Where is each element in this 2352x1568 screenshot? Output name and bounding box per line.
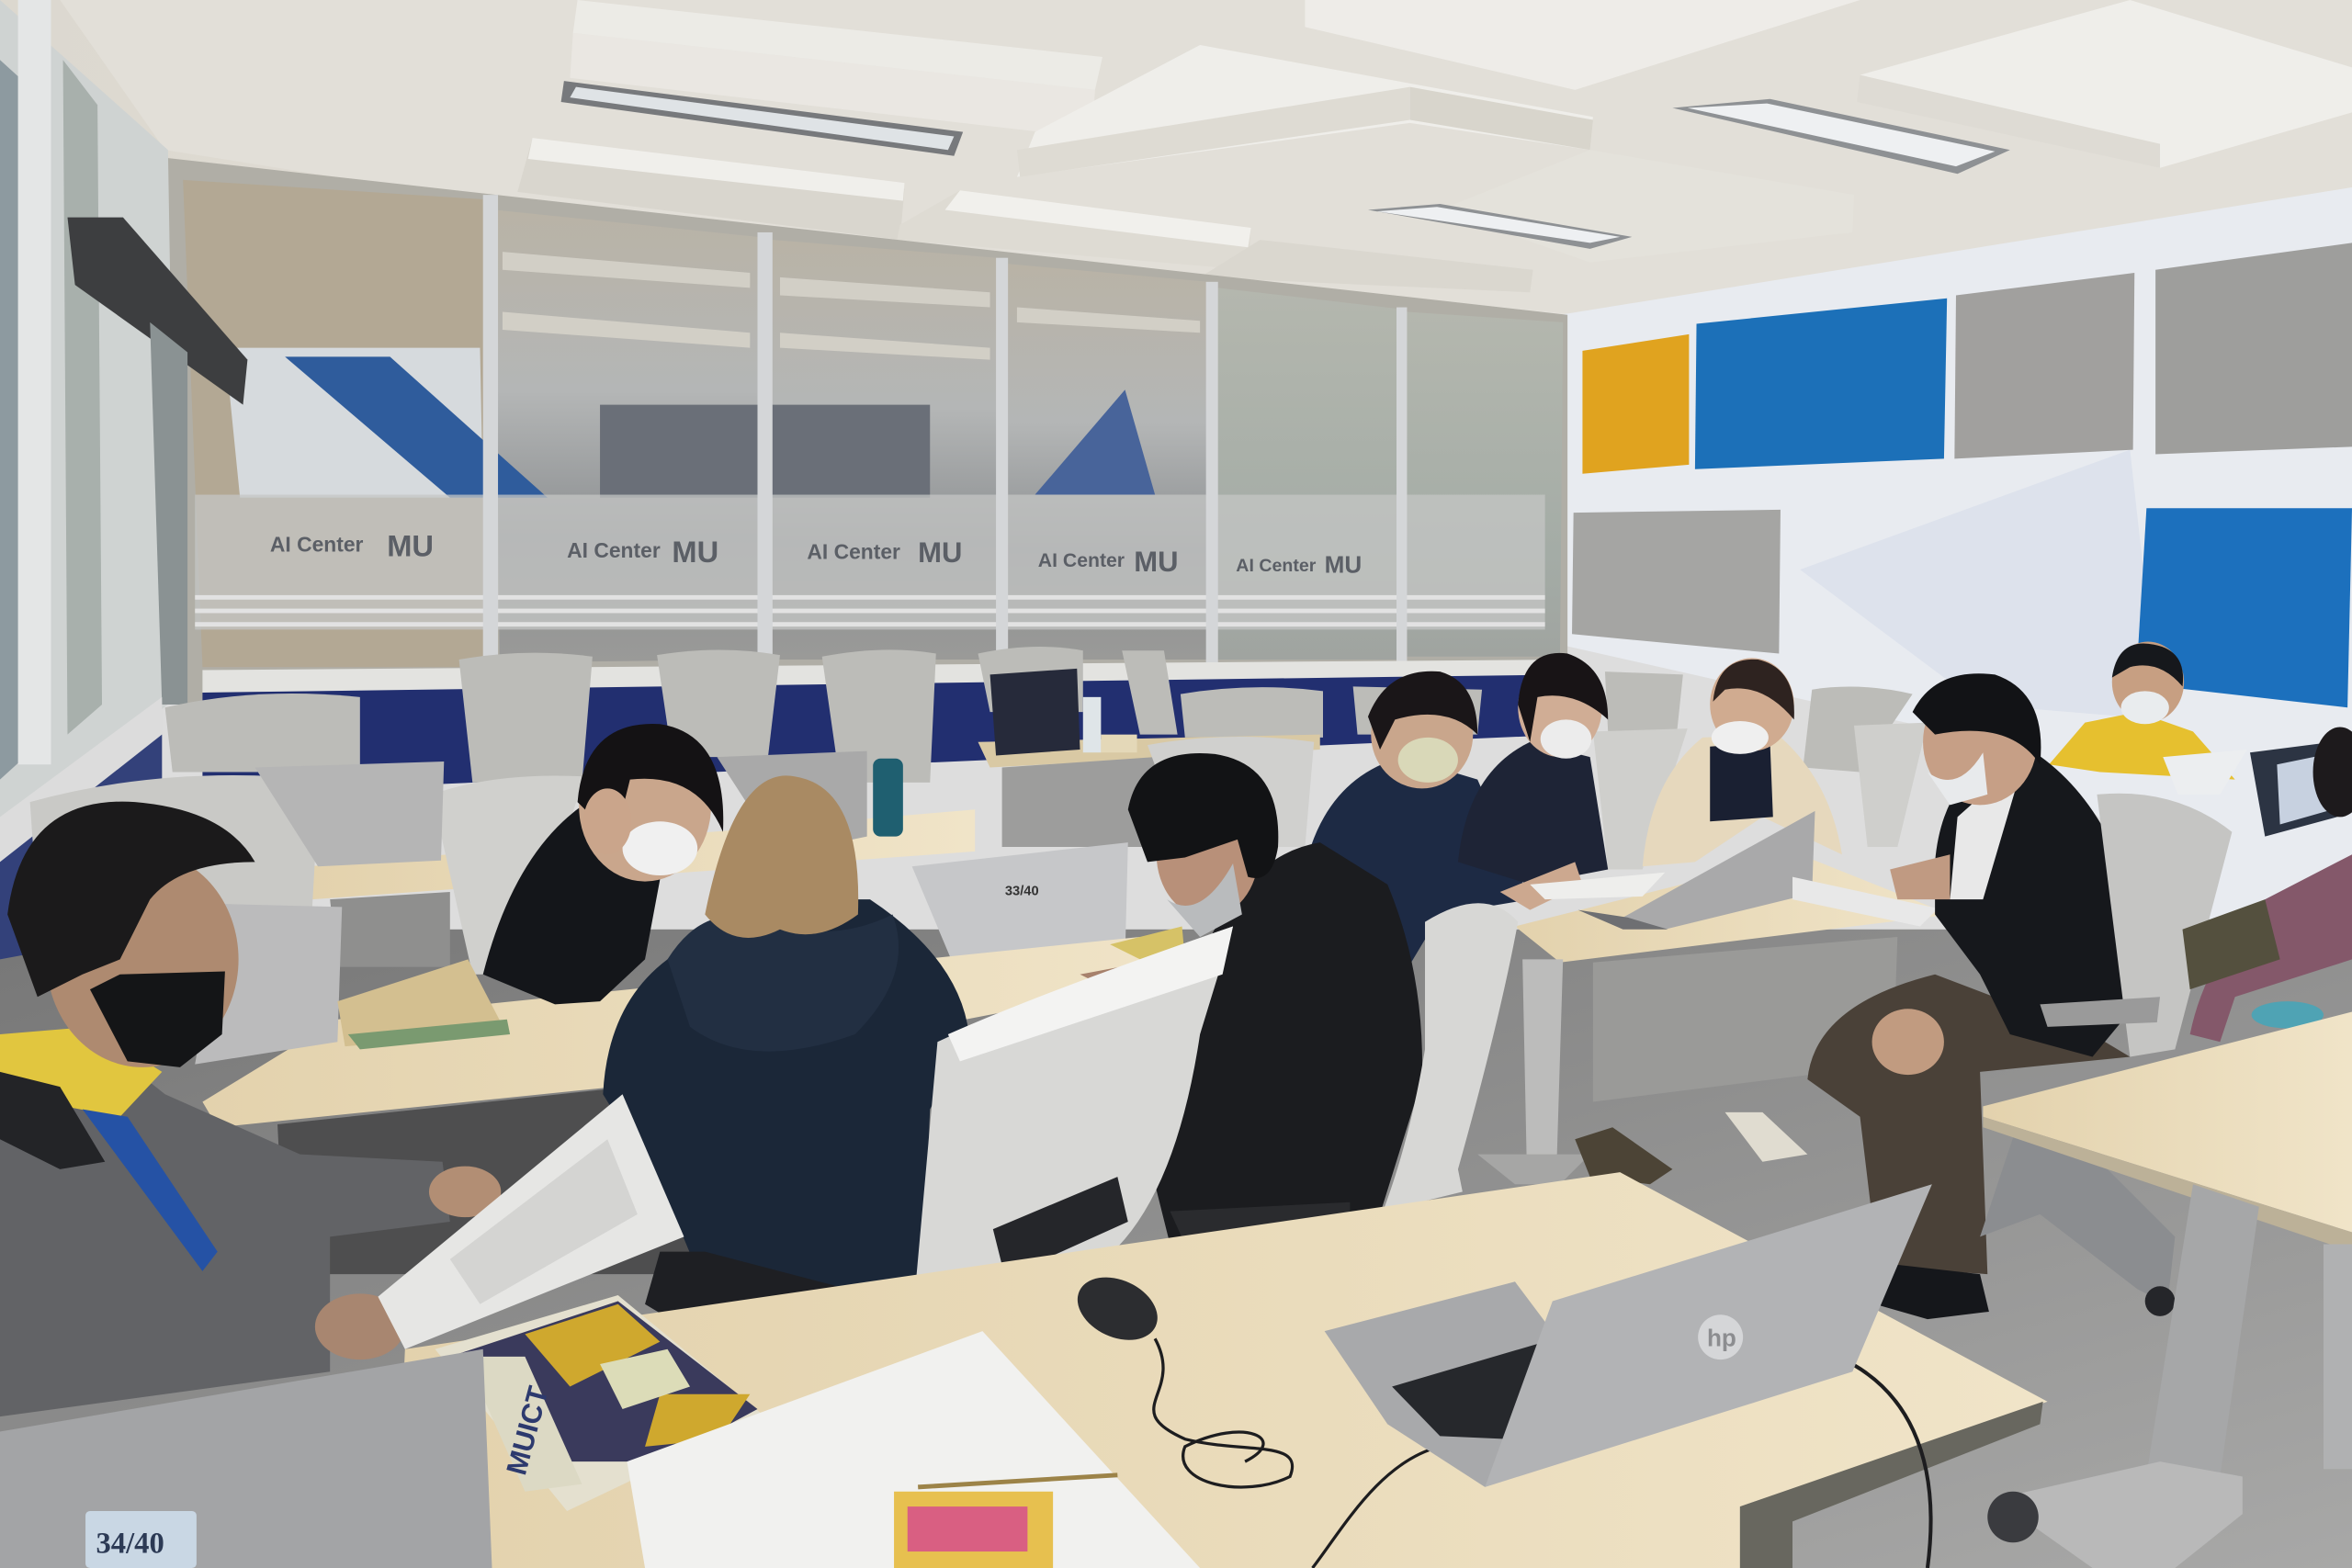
person: man in grey jacket, left foreground — [0, 802, 501, 1416]
wall panel: yellow — [1582, 334, 1689, 474]
colourful card on desk — [894, 1475, 1117, 1568]
glass logo text — [270, 528, 1362, 578]
person: woman in navy hoodie, back view — [603, 775, 969, 1304]
back row chairs — [165, 647, 1913, 783]
wall panel: blue low — [2136, 508, 2352, 707]
glass logo text: AI Center — [807, 540, 900, 564]
person: woman at far right, laptop — [2183, 727, 2352, 1042]
white paper on desk — [627, 1331, 1200, 1568]
laptop: HP foreground — [1325, 1184, 1932, 1487]
glass logo text: AI Center — [1236, 556, 1317, 576]
ceiling acoustic panels and lights — [517, 0, 2352, 292]
person: man in black jacket, right — [1807, 673, 2142, 1319]
chair: white mesh, center — [645, 927, 1233, 1331]
group of women: navy jacket, black jacket, cream cardigan — [1302, 653, 1842, 989]
person: woman in black with mask — [483, 724, 723, 1004]
chairs behind first row — [30, 723, 1928, 975]
ceiling — [0, 0, 2352, 360]
blue wainscot under glass — [202, 674, 1567, 795]
left windows — [0, 0, 247, 959]
laptop: foreground bottom left with label — [0, 1349, 492, 1568]
laptops middle row — [255, 751, 1128, 980]
right middle desk with laptop — [1477, 811, 1950, 1184]
laptop: HP foreground: hp — [1707, 1324, 1736, 1351]
glass logo text: MU — [672, 535, 718, 569]
back table and shopping bag — [978, 669, 1320, 847]
desk front right with pedestal — [1983, 1012, 2352, 1568]
front desk — [398, 1172, 2048, 1568]
middle left desk — [308, 809, 975, 967]
right wall — [1560, 187, 2352, 1049]
glass logo text: MU — [1134, 546, 1179, 578]
person: boy in black jacket with mask — [1080, 753, 1422, 1245]
document held by man — [378, 1094, 684, 1349]
laptop: foreground bottom left with label: 34/40 — [96, 1528, 164, 1561]
first row desk — [195, 904, 1200, 1274]
glass logo text: AI Center — [270, 533, 364, 557]
laptop label 33/40: 33/40 — [1005, 884, 1039, 898]
wall panel: grey right — [2155, 243, 2352, 454]
wall panel: grey — [1954, 273, 2134, 458]
glass logo text: MU — [918, 536, 962, 569]
booklet: MUICT with hexagons — [435, 1295, 765, 1511]
glass logo text: MU — [387, 528, 434, 562]
glass logo text: AI Center — [1038, 550, 1125, 571]
wall panel: blue — [1695, 299, 1947, 469]
glass logo text: AI Center — [567, 538, 661, 562]
mouse and cable — [1068, 1265, 1931, 1568]
glass partition wall — [162, 157, 1567, 705]
glass logo text: MU — [1325, 550, 1362, 578]
chair: white, behind boy — [1170, 903, 1518, 1245]
booklet: MUICT with hexagons: MUICT — [500, 1382, 555, 1478]
floor — [0, 930, 2352, 1568]
chair: man's chair with casters — [1980, 794, 2232, 1316]
person: man far back in yellow — [2049, 641, 2247, 795]
wall panel: grey low — [1572, 510, 1781, 654]
